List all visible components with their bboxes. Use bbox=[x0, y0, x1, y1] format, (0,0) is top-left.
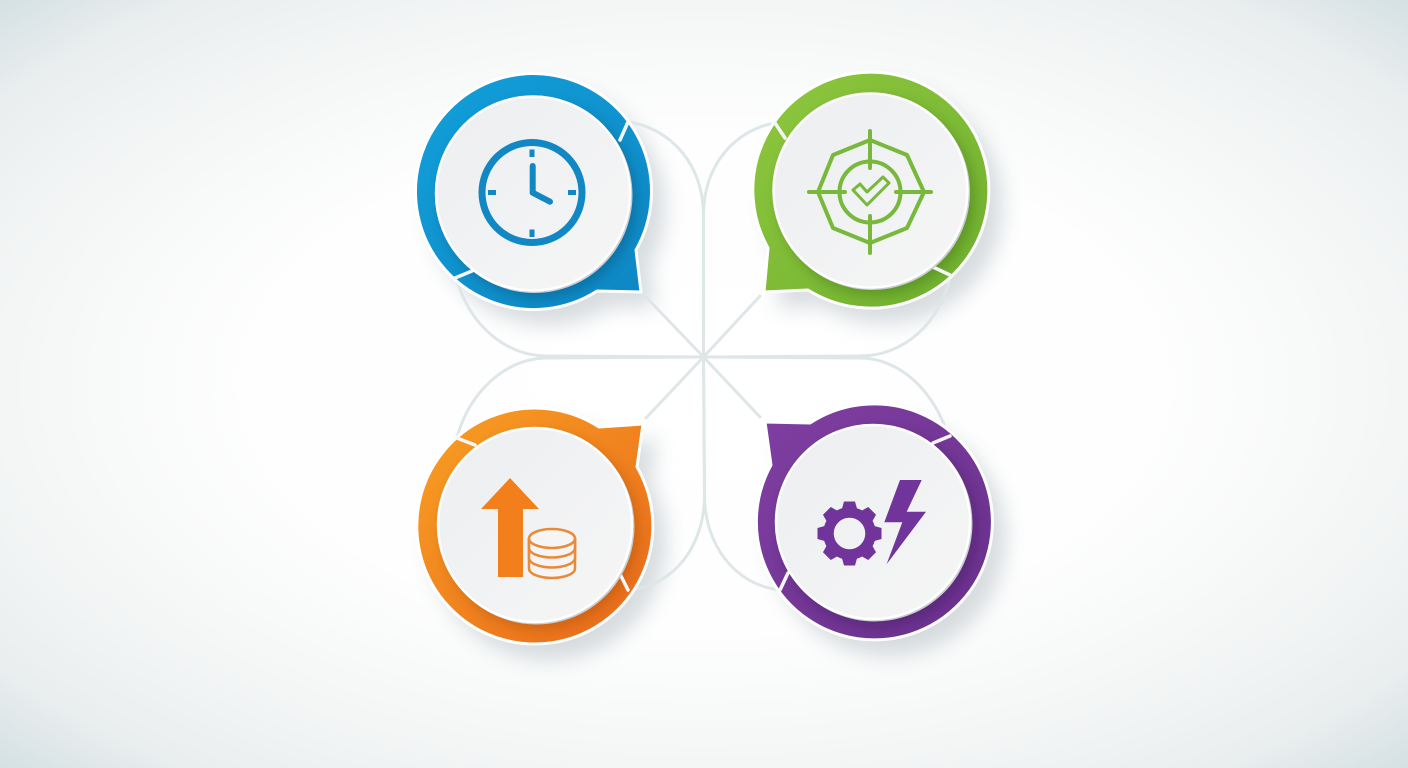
ring gaps bbox=[455, 122, 628, 278]
icon: target with check bbox=[809, 131, 931, 253]
green ring with pointer bbox=[753, 72, 989, 308]
connector lines bbox=[457, 122, 950, 590]
panel: orange growth badge bbox=[417, 408, 653, 644]
ring gaps bbox=[457, 438, 628, 590]
lightning bolt bbox=[884, 480, 926, 564]
blue ring with pointer bbox=[415, 74, 651, 310]
icon: arrow and coins bbox=[481, 478, 575, 578]
coin stack bbox=[529, 529, 575, 578]
white disc bbox=[774, 94, 970, 290]
panel: green target badge bbox=[753, 72, 989, 308]
icon: gear and lightning bbox=[818, 480, 926, 566]
gear bbox=[818, 502, 882, 566]
disc shadow on ring bbox=[778, 99, 974, 295]
orange ring with pointer bbox=[417, 408, 653, 644]
up arrow bbox=[481, 478, 539, 577]
disc shadow on ring bbox=[780, 430, 976, 626]
white disc bbox=[436, 96, 632, 293]
ring gaps bbox=[775, 123, 950, 275]
white disc bbox=[776, 425, 972, 622]
panel: blue clock badge bbox=[415, 74, 651, 310]
badge drop shadows bbox=[429, 88, 1006, 660]
panel: purple gear badge bbox=[756, 404, 992, 640]
ring gaps bbox=[780, 436, 950, 590]
white disc bbox=[438, 428, 634, 624]
disc shadow on ring bbox=[440, 102, 636, 298]
disc shadow on ring bbox=[442, 433, 638, 629]
icon: clock bbox=[482, 142, 582, 242]
purple ring with pointer bbox=[756, 404, 992, 640]
